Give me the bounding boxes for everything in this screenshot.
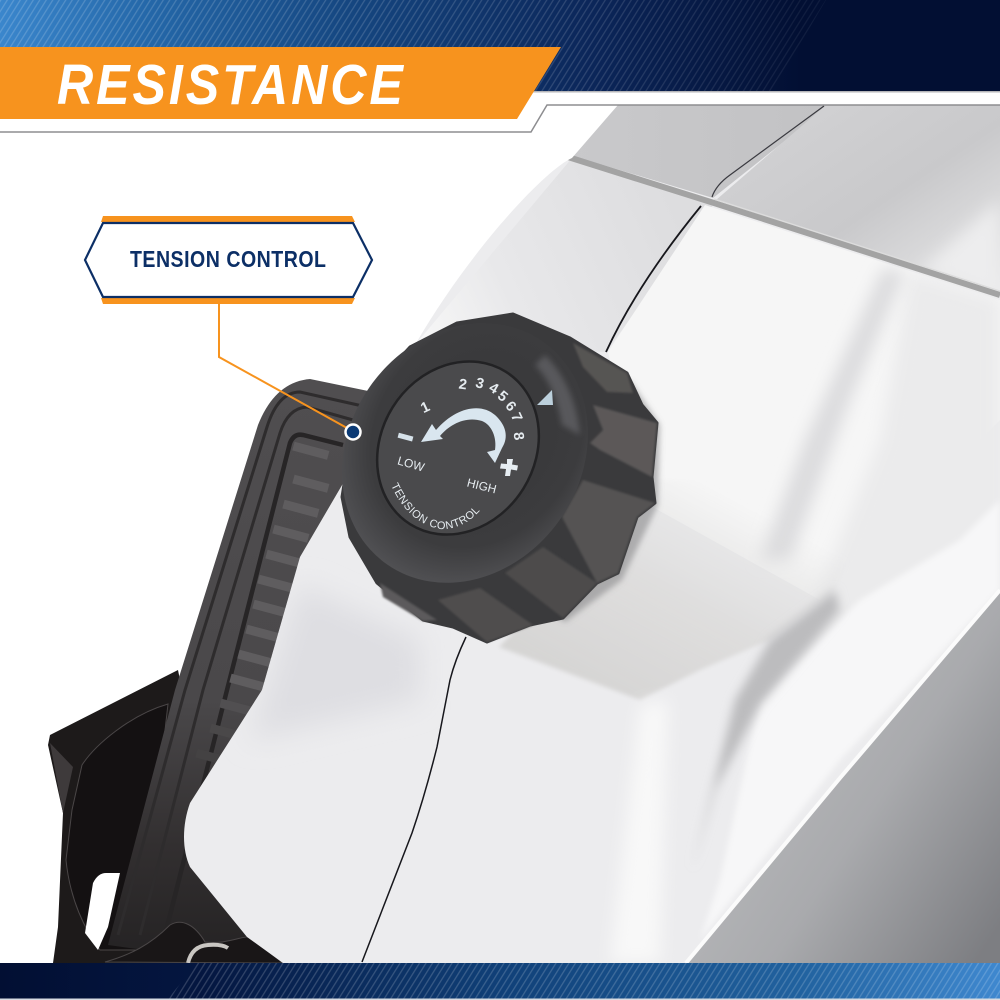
title ribbon [0,47,561,119]
soft crease wedge [708,590,843,807]
callout leader line [219,304,347,428]
dial numbers: 7 [507,410,525,424]
callout pointer dot [346,424,360,440]
knob body [342,314,657,642]
knob front cap [292,275,638,631]
banner diagonal stripes [0,0,826,92]
photo: strap loop and metal ring [105,922,283,963]
dial numbers: 2 [458,377,468,393]
direction arrow [421,408,506,463]
white highlight along panel edge [686,590,1000,963]
top cover panels [570,105,830,198]
lower seam [362,637,466,962]
top seam [712,106,824,197]
banner lower edge [530,91,1000,92]
grey soft top right highlight [929,208,1000,280]
bright strip beside lower panel [700,500,1000,940]
bottom banner [0,963,1000,1000]
dial numbers: 5 [494,388,511,405]
photo: silver machine housing [150,100,1000,970]
curved dial label: TENSION CONTROL [392,482,480,530]
dial numbers [418,375,526,441]
minus sign [398,433,413,441]
photo: foot strap [48,670,290,963]
callout: tension control [85,216,372,304]
metallic trim strip [568,157,1000,295]
knob grip ribs [380,343,657,642]
upper left shell panel [415,158,713,352]
right shell panel [833,282,994,584]
photo: foot pedal [108,379,373,963]
dial indicator triangle [537,390,553,405]
dial numbers: 4 [486,380,501,398]
upper seam [606,206,701,352]
bright vertical crease [616,708,663,958]
top banner background [0,0,1000,92]
cap highlight [535,355,580,435]
white header strip with grey outline [0,92,1000,132]
title: RESISTANCE [57,53,405,117]
facet below the knob [500,504,816,700]
lower right grey panel [686,590,1000,963]
dial numbers: 3 [474,375,486,393]
knob contact shadow [530,380,660,622]
plus sign [500,459,518,476]
high label: HIGH [466,476,498,496]
bottom banner diagonal stripes [167,963,1000,1000]
tension control knob [340,312,663,644]
soft shadow band [760,268,905,560]
low label: LOW [396,454,427,475]
dial face [345,331,571,565]
dial numbers: 6 [502,398,519,415]
dial numbers: 1 [418,399,432,417]
callout label: TENSION CONTROL [130,247,326,272]
lower left shading [252,596,417,729]
upper centre bright panel [608,205,892,569]
dial numbers: 8 [510,431,526,441]
